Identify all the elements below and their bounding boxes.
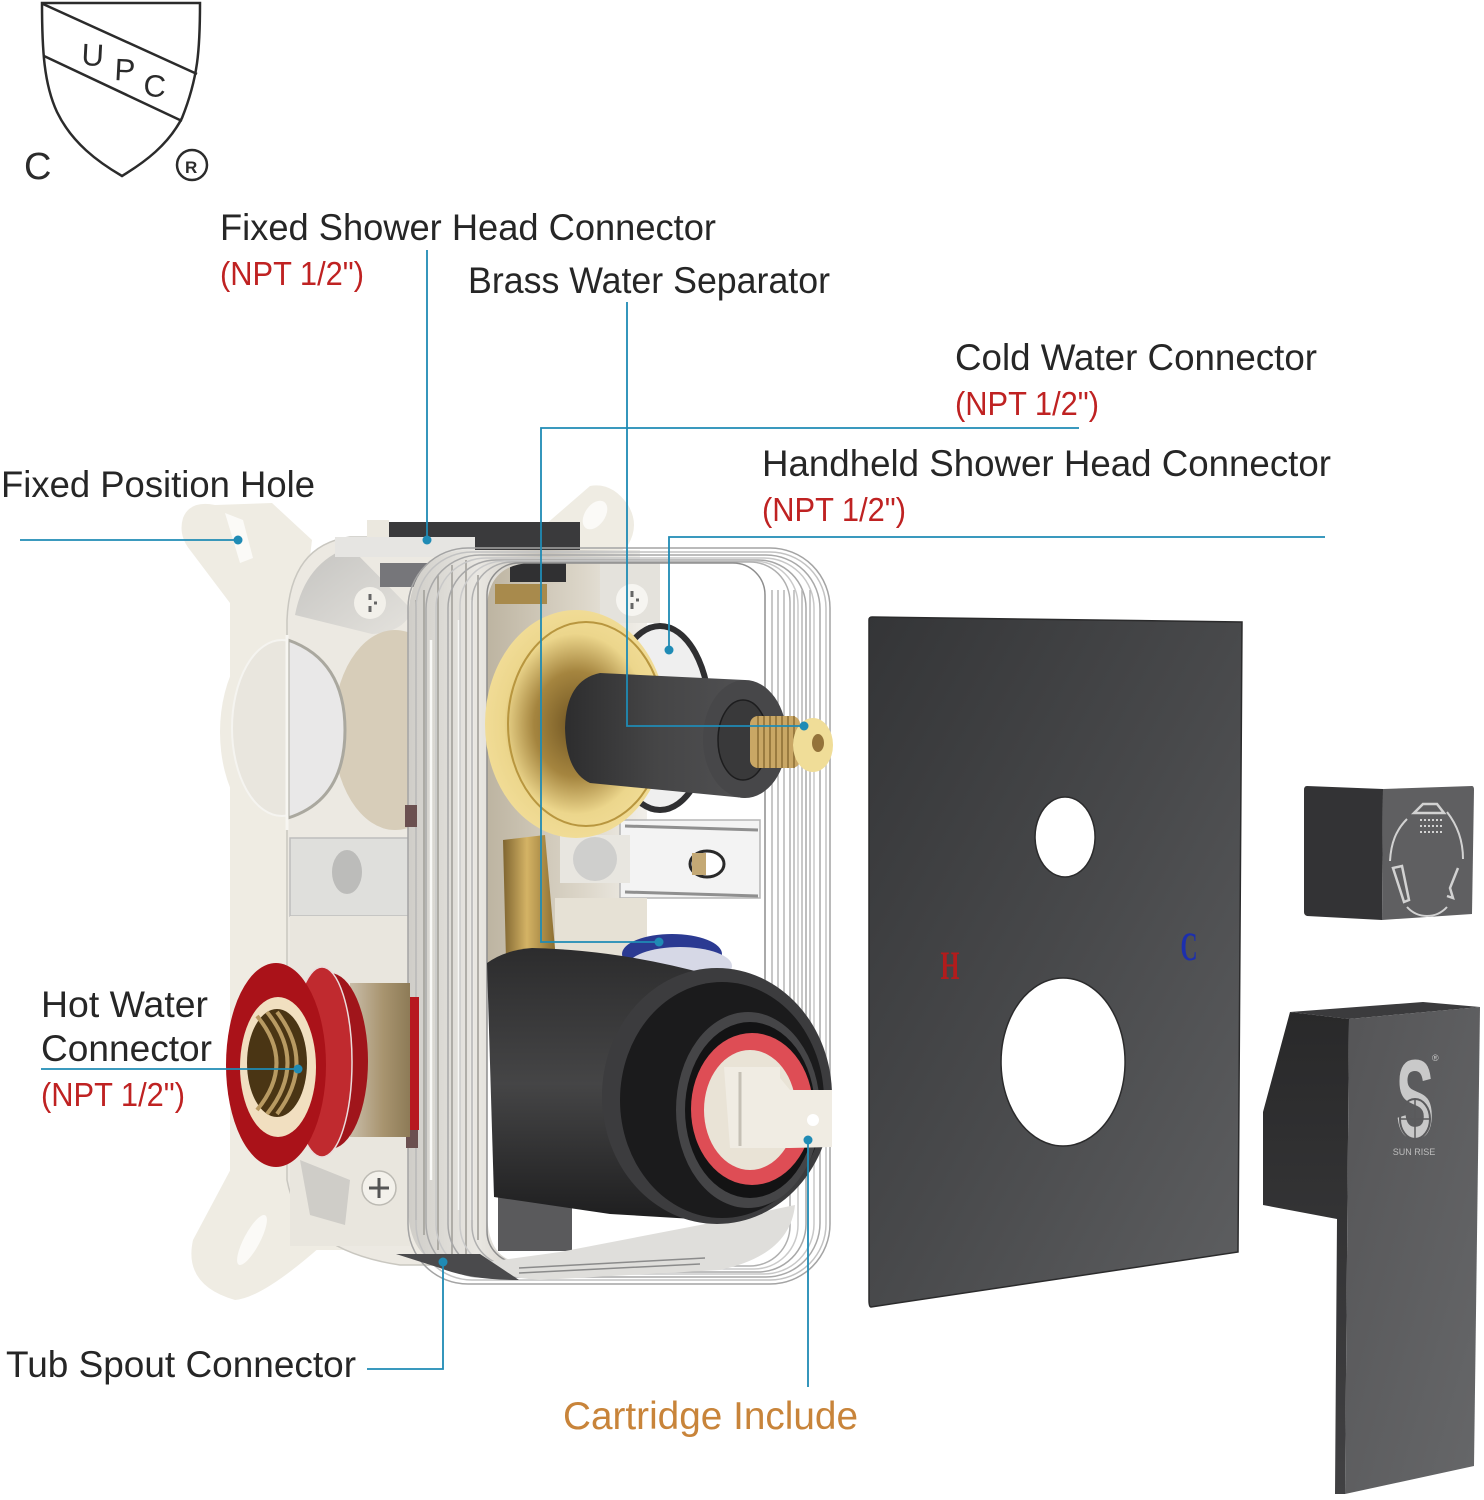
label: fixed shower head connector: Fixed Shower Head Connector [220, 207, 716, 248]
label: fixed position hole: Fixed Position Hole [1, 464, 315, 505]
icon: cUPC certification shield [24, 3, 207, 188]
cylinder end collar [602, 968, 832, 1224]
label: cold water connector: Cold Water Connector [955, 337, 1317, 378]
clear back housing [287, 537, 480, 1265]
lever handle [1263, 1002, 1480, 1494]
label: hot water connector line two: Connector [41, 1028, 212, 1069]
cream panel and brass connecting tube [555, 898, 647, 960]
brass escutcheon disc [485, 610, 667, 838]
interior backing [487, 563, 647, 963]
diverter icon [1390, 804, 1463, 916]
clear front frame: left stripe band [408, 550, 640, 1272]
label: cartridge include: Cartridge Include [563, 1395, 858, 1438]
square diverter knob [1304, 786, 1474, 920]
callout lines [20, 250, 1325, 1387]
black stem sleeve [565, 673, 745, 798]
icon: cUPC certification shield: C [24, 146, 51, 188]
icon: cUPC certification shield: C [143, 68, 167, 104]
Sun Rise logo: SUN RISE [1393, 1147, 1435, 1157]
knockout circle [232, 640, 332, 816]
icon: cUPC certification shield: R [185, 158, 197, 177]
Sun Rise logo [1393, 1037, 1439, 1162]
sleeve end [703, 680, 787, 798]
product illustration: concealed valve body [182, 485, 833, 1300]
rear handheld port ring [610, 626, 710, 810]
label: NPT size: (NPT 1/2") [955, 385, 1099, 422]
C marking: C [1180, 924, 1198, 969]
label: NPT size: (NPT 1/2") [220, 255, 364, 292]
Sun Rise logo: ® [1432, 1053, 1439, 1063]
H marking: H [940, 943, 960, 988]
base dark strip [396, 1254, 519, 1280]
beige knockout backing [333, 630, 457, 830]
red cartridge ring [691, 1033, 813, 1185]
ear slots [225, 496, 612, 1268]
lower housing wall [290, 916, 410, 1246]
label: brass water separator: Brass Water Separator [468, 260, 830, 301]
mounting bracket with ears [182, 485, 634, 1300]
label: tub spout connector: Tub Spout Connector [6, 1344, 356, 1385]
hot water port [226, 963, 410, 1167]
side red strip [408, 997, 419, 1130]
brass spline pin [750, 716, 800, 768]
label: NPT size: (NPT 1/2") [41, 1076, 185, 1113]
escutcheon plate [869, 617, 1242, 1307]
lower metal port [498, 1195, 572, 1251]
white cartridge stem [724, 1067, 832, 1148]
icon: cUPC certification shield: U [81, 37, 105, 73]
callout dots [234, 536, 812, 1266]
upper corner glass [295, 547, 412, 634]
label: NPT size: (NPT 1/2") [762, 491, 906, 528]
icon: cUPC certification shield: P [114, 52, 136, 88]
Sun Rise logo: S [1396, 1037, 1434, 1162]
label: hot water connector: Hot Water [41, 984, 208, 1025]
glass floor [487, 1205, 795, 1280]
label: handheld shower head connector: Handheld Shower Head Connector [762, 443, 1331, 484]
main black valve cylinder [487, 948, 710, 1220]
screws [300, 584, 648, 1225]
top black port [388, 522, 580, 550]
horizontal clear strut [290, 838, 490, 916]
blue cold port [622, 934, 722, 974]
right clear strut [560, 820, 760, 898]
